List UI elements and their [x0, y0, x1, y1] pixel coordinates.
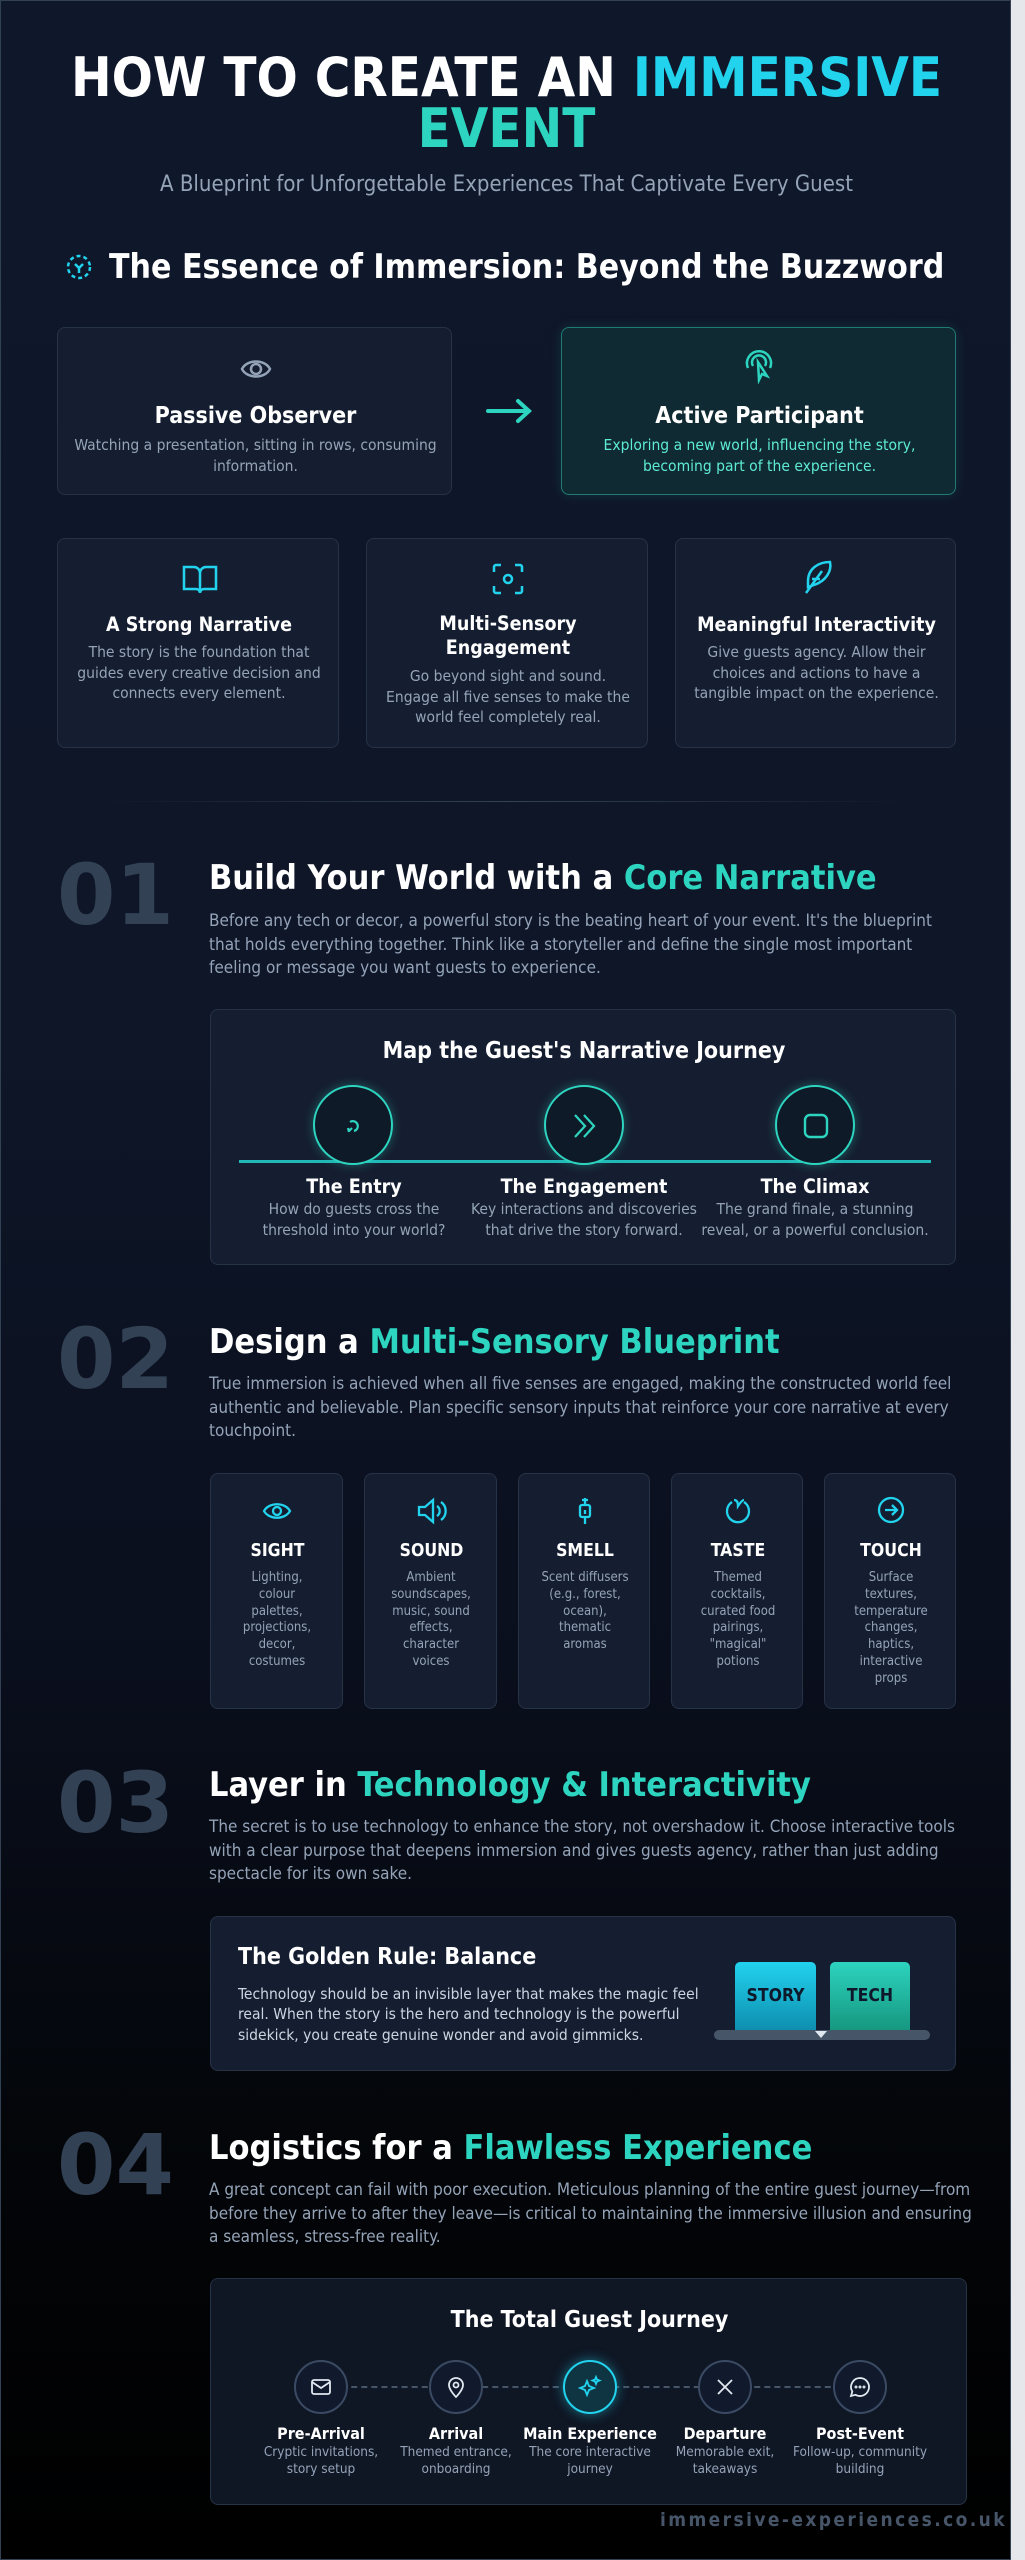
panel: taste: TASTE [711, 1541, 765, 1561]
panel: touch: interactive [860, 1654, 922, 1669]
label: climax: The grand finale, a stunning reveal, or a powerful conclusion. [701, 1200, 929, 1238]
panel: taste: cocktails, [711, 1587, 765, 1602]
heading 03: Layer in Technology & Interactivity [209, 1765, 811, 1805]
step number 01: 01 [57, 846, 174, 944]
icon: climax [775, 1085, 855, 1165]
icon: departure [698, 2360, 752, 2414]
panel: multi-sensory: Engagement [446, 636, 570, 659]
label: main experience: The core interactive journey [529, 2444, 651, 2477]
panel: sight: SIGHT [250, 1541, 305, 1561]
panel: touch: changes, [865, 1620, 917, 1635]
panel: golden rule [210, 1916, 956, 2071]
label: entry [263, 1175, 445, 1238]
panel: touch: haptics, [868, 1637, 914, 1652]
label: main experience: Main Experience [523, 2424, 657, 2443]
panel: sight: colour [259, 1587, 295, 1602]
label: departure [676, 2424, 774, 2477]
panel: sound: voices [412, 1654, 450, 1669]
icon: pointer [746, 350, 772, 384]
panel: narrative journey: Map the Guest's Narrative Journey [383, 1038, 785, 1064]
panel: passive observer: Watching a presentation, sitting in rows, consuming information. [74, 436, 437, 474]
title: HOW TO CREATE AN IMMERSIVE [71, 46, 942, 109]
panel: taste [671, 1473, 803, 1709]
panel: total guest journey: The Total Guest Journey [451, 2307, 728, 2333]
label: main experience [523, 2424, 657, 2477]
label: departure: Departure [684, 2424, 766, 2443]
balance graphic [714, 1962, 930, 2040]
panel: sound: effects, [409, 1620, 453, 1635]
heading 04: Logistics for a Flawless Experience [209, 2128, 812, 2168]
section heading: essence: The Essence of Immersion: Beyond the Buzzword [109, 247, 944, 286]
balance graphic: STORY [746, 1986, 805, 2006]
paragraph 02: True immersion is achieved when all five senses are engaged, making the constructed world feel authentic and believable. Plan specific sensory inputs that reinforce your core narrative at every touchpoint. [209, 1374, 951, 1441]
panel: active participant [561, 327, 956, 495]
panel: touch: textures, [865, 1587, 917, 1602]
label: engagement [471, 1175, 697, 1238]
step number 02: 02 [57, 1310, 174, 1408]
label: pre-arrival: Pre-Arrival [277, 2424, 365, 2443]
panel: interactivity [675, 538, 956, 748]
panel: smell [518, 1473, 650, 1709]
icon: book [182, 566, 218, 593]
heading 02: Design a Multi-Sensory Blueprint [209, 1322, 780, 1362]
panel: smell: (e.g., forest, [549, 1587, 621, 1602]
panel: touch [824, 1473, 956, 1709]
panel: narrative journey [210, 1009, 956, 1265]
panel: strong narrative [57, 538, 339, 748]
label: arrival: Arrival [429, 2424, 483, 2443]
label: departure: Memorable exit, takeaways [676, 2444, 774, 2477]
panel: multi-sensory: Multi-Sensory [439, 612, 577, 635]
label: engagement: Key interactions and discoveries that drive the story forward. [471, 1200, 697, 1238]
subtitle: A Blueprint for Unforgettable Experiences That Captivate Every Guest [160, 172, 853, 197]
heading 01: Build Your World with a Core Narrative [209, 858, 877, 898]
balance graphic: TECH [847, 1986, 893, 2006]
panel: passive observer: Passive Observer [155, 403, 356, 429]
panel: taste: "magical" [710, 1637, 766, 1652]
panel: touch: temperature [854, 1604, 928, 1619]
panel: active participant: Exploring a new world, influencing the story, becoming part of the experience. [604, 436, 915, 474]
label: pre-arrival [264, 2424, 378, 2477]
panel: interactivity: Give guests agency. Allow their choices and actions to have a tangible impact on the experience. [694, 643, 939, 702]
panel: sound: Ambient [406, 1570, 456, 1585]
paragraph 03: The secret is to use technology to enhance the story, not overshadow it. Choose interactive tools with a clear purpose that deepens immersion and gives guests agency, rather than just adding spectacle for its own sake. [209, 1817, 955, 1884]
panel: sight: palettes, [251, 1604, 303, 1619]
label: arrival [400, 2424, 512, 2477]
panel: total guest journey [210, 2278, 967, 2505]
panel: sound: music, sound [392, 1604, 470, 1619]
panel: sound: SOUND [400, 1541, 463, 1561]
panel: golden rule: The Golden Rule: Balance [238, 1944, 536, 1970]
step number 03: 03 [57, 1754, 174, 1852]
footer url: immersive-experiences.co.uk [660, 2509, 1007, 2531]
panel: sound: soundscapes, [391, 1587, 471, 1602]
panel: smell: SMELL [556, 1541, 614, 1561]
panel: strong narrative: A Strong Narrative [106, 613, 292, 636]
label: entry: How do guests cross the threshold into your world? [263, 1200, 445, 1238]
panel: touch: props [875, 1671, 907, 1686]
panel: strong narrative: The story is the foundation that guides every creative decision and connects every element. [77, 643, 321, 702]
panel: taste: pairings, [713, 1620, 763, 1635]
icon: post-event [833, 2360, 887, 2414]
label: post-event: Follow-up, community building [793, 2444, 927, 2477]
icon: main experience [563, 2360, 617, 2414]
title: EVENT [418, 97, 595, 160]
panel: touch: Surface [869, 1570, 913, 1585]
label: post-event [793, 2424, 927, 2477]
panel: passive observer [57, 327, 452, 495]
panel: interactivity: Meaningful Interactivity [697, 613, 936, 636]
label: climax [701, 1175, 929, 1238]
label: climax: The Climax [761, 1175, 869, 1198]
panel: golden rule: Technology should be an invisible layer that makes the magic feel real. When the story is the hero and technology is the powerful sidekick, you create genuine wonder and avoid gimmicks. [238, 1985, 699, 2044]
icon: arrival [429, 2360, 483, 2414]
panel: taste: Themed [714, 1570, 762, 1585]
step number 04: 04 [57, 2116, 174, 2214]
panel: sight: costumes [249, 1654, 305, 1669]
icon: eye [240, 360, 272, 378]
label: post-event: Post-Event [816, 2424, 904, 2443]
panel: sound [364, 1473, 497, 1709]
title [71, 46, 942, 160]
label: pre-arrival: Cryptic invitations, story setup [264, 2444, 378, 2477]
panel: sound: character [403, 1637, 459, 1652]
icon: engagement [544, 1085, 624, 1165]
panel: multi-sensory: Go beyond sight and sound. [410, 667, 606, 685]
panel: sight: Lighting, [252, 1570, 302, 1585]
panel: smell: Scent diffusers [541, 1570, 629, 1585]
paragraph 04: A great concept can fail with poor execution. Meticulous planning of the entire guest journey—from before they arrive to after they leave—is critical to maintaining the immersive illusion and ensuring a seamless, stress-free reality. [209, 2180, 972, 2247]
panel: sight [210, 1473, 343, 1709]
label: engagement: The Engagement [501, 1175, 667, 1198]
paragraph 01: Before any tech or decor, a powerful story is the beating heart of your event. It's the blueprint that holds everything together. Think like a storyteller and define the single most important feeling or message you want guests to experience. [209, 911, 932, 978]
icon: scan [492, 564, 524, 594]
icon: focus [66, 254, 92, 280]
panel: sight: projections, [243, 1620, 311, 1635]
label: entry: The Entry [306, 1175, 402, 1198]
panel: smell: aromas [563, 1637, 607, 1652]
panel: taste: curated food [701, 1604, 775, 1619]
icon: pre-arrival [294, 2360, 348, 2414]
panel: touch: TOUCH [860, 1541, 922, 1561]
label: arrival: Themed entrance, onboarding [400, 2444, 512, 2477]
panel: smell: thematic [559, 1620, 611, 1635]
panel: taste: potions [716, 1654, 760, 1669]
icon: entry [313, 1085, 393, 1165]
panel: smell: ocean), [563, 1604, 607, 1619]
panel: multi-sensory [366, 538, 648, 748]
panel: multi-sensory: Engage all five senses to make the world feel completely real. [386, 688, 630, 726]
arrow [486, 398, 532, 424]
icon: feather [805, 560, 832, 594]
panel: sight: decor, [259, 1637, 295, 1652]
panel: active participant: Active Participant [655, 403, 864, 429]
